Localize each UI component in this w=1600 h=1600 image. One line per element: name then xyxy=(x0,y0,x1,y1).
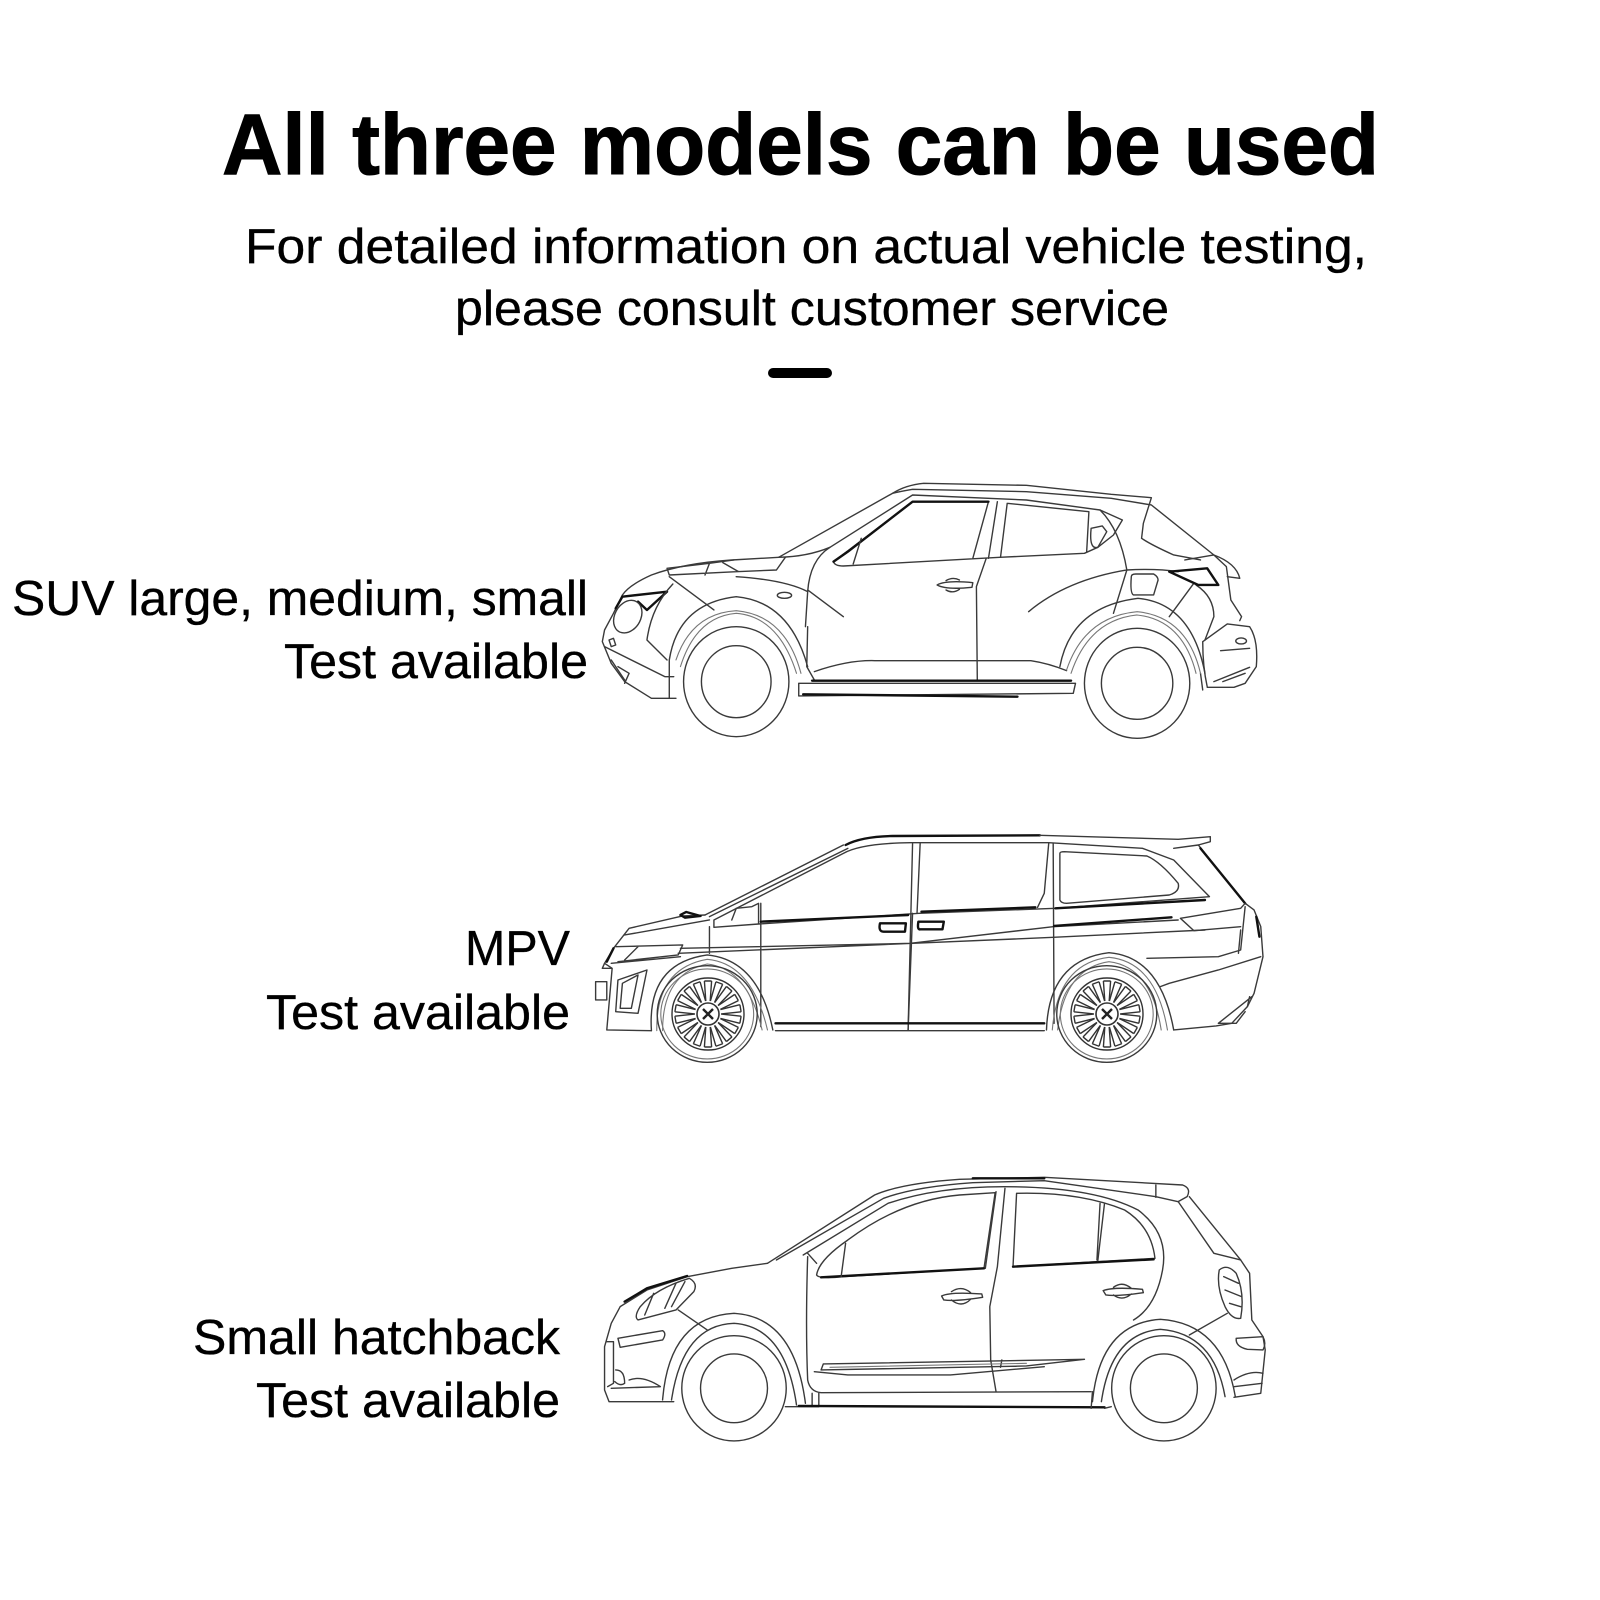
wheel rim: MPV front xyxy=(672,978,744,1050)
car: SUV line drawing xyxy=(602,483,1257,738)
car: MPV line drawing xyxy=(596,835,1263,1062)
label: small hatchback: Test available xyxy=(256,1374,560,1428)
subtitle: please consult customer service xyxy=(455,282,1169,336)
label: MPV: Test available xyxy=(266,986,570,1040)
label: SUV xyxy=(12,572,588,689)
divider dash xyxy=(768,368,832,378)
label: small hatchback xyxy=(193,1311,561,1428)
subtitle: For detailed information on actual vehicle testing, xyxy=(245,220,1367,274)
wheel rim: MPV rear xyxy=(1071,978,1143,1050)
label: MPV: MPV xyxy=(465,922,570,976)
label: SUV: Test available xyxy=(284,635,588,689)
label: small hatchback: Small hatchback xyxy=(193,1311,561,1365)
title: All three models can be used xyxy=(222,97,1379,193)
car: small hatchback line drawing xyxy=(605,1177,1265,1441)
subtitle xyxy=(245,220,1367,336)
label: MPV xyxy=(266,922,570,1040)
label: SUV: SUV large, medium, small xyxy=(12,572,588,626)
